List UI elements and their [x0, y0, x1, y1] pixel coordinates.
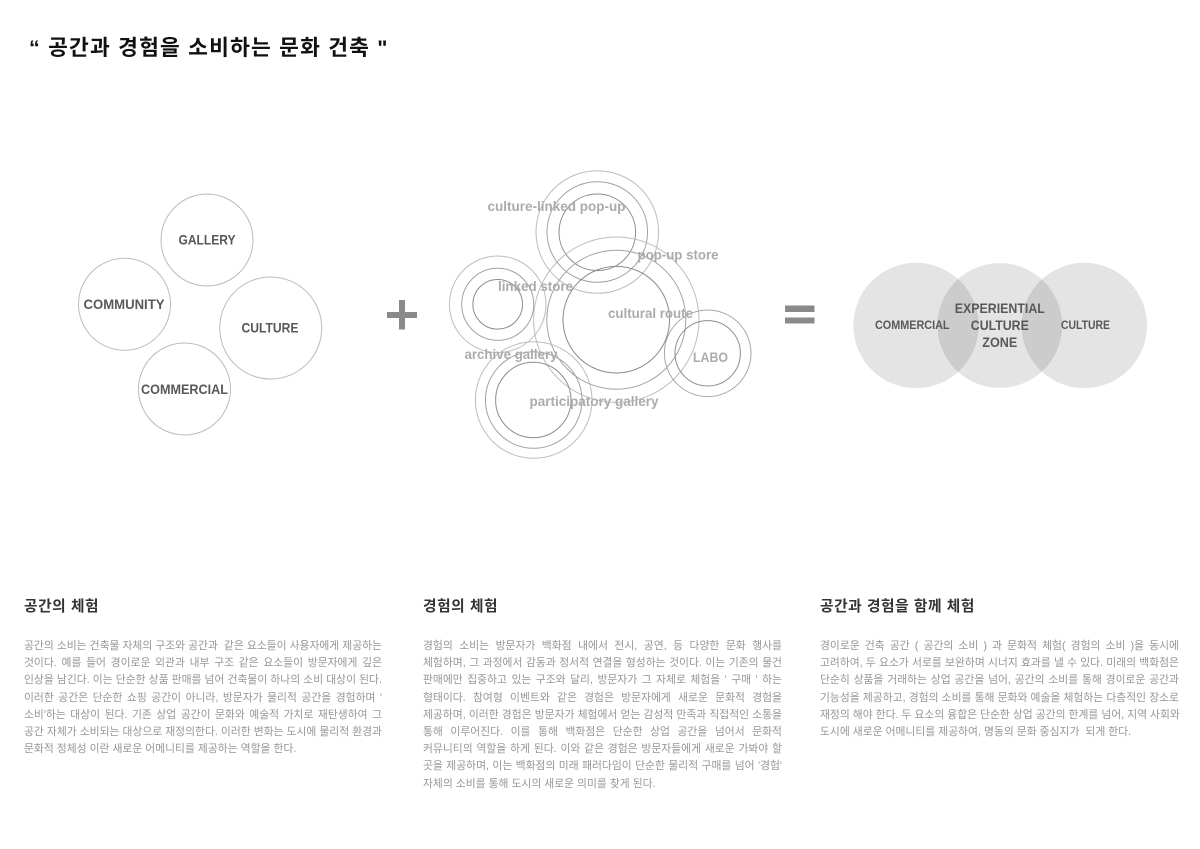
label: archive gallery: archive gallery: [464, 347, 558, 362]
text block: space and experience together: 도시에 새로운 어메니티를 제공하여, 명동의 문화 중심지가 되게 한다.: [820, 726, 1131, 738]
title: “ 공간과 경험을 소비하는 문화 건축 ": [29, 36, 389, 60]
label: experiential culture zone: [955, 300, 1045, 350]
text block: space experience: 소비'하는 대상이 된다. 기존 상업 공간이 문화와 예술적 가치로 재탄생하여 그: [24, 709, 382, 721]
text block: experience: 커뮤니티의 역할을 하게 된다. 이와 같은 경험은 방문자들에게 새로운 가봐야 할: [423, 743, 782, 755]
text block: experience: 제공하며, 이러한 경험은 방문자가 체험에서 얻는 감성적 만족과 직접적인 소통을: [423, 709, 782, 721]
icon: plus: [387, 300, 417, 330]
heading: experience: 경험의 체험: [423, 599, 498, 615]
text block: experience: 자체의 소비를 통해 도시의 새로운 의미를 찾게 된다.: [423, 778, 656, 790]
circle: culture: CULTURE: [242, 320, 298, 336]
rings: linked store: [449, 256, 546, 353]
text block: experience: 통해 이루어진다. 이를 통해 백화점은 단순한 상업 공간을 넘어서 문화적: [423, 726, 782, 738]
text block: experience: 체험하며, 그 과정에서 감동과 정서적 연결을 형성하는 것이다. 이는 기존의 물건: [423, 657, 782, 669]
text block: experience: 판매에만 집중하고 있는 구조와 달리, 방문자가 그 자체로 체험을 ' 구매 ' 하는: [423, 674, 782, 686]
label: experiential culture zone: EXPERIENTIAL: [955, 300, 1045, 316]
text block: space experience: 이러한 공간은 단순한 쇼핑 공간이 아니라, 방문자가 물리적 공간을 경험하며 ': [24, 692, 382, 704]
label: experiential culture zone: ZONE: [982, 334, 1017, 350]
ring labels: [464, 199, 728, 409]
rings: culture-linked pop-up: [536, 171, 659, 293]
circle: gallery: GALLERY: [178, 232, 236, 248]
text block: experience: 곳을 제공하며, 이는 백화점의 미래 패러다임이 단순한 물리적 구매를 넘어 '경험': [423, 760, 782, 772]
circle: community: [78, 258, 170, 350]
text block: experience: [423, 640, 782, 790]
text block: space and experience together: 경이로운 건축 공간 ( 공간의 소비 ) 과 문화적 체험( 경험의 소비 )을 동시에: [820, 640, 1179, 652]
diagram: nested program rings: [449, 171, 751, 458]
text block: space experience: 공간 자체가 소비되는 대상으로 재정의한다. 이러한 변화는 도시에 물리적 환경과: [24, 726, 382, 738]
circle: gallery: [161, 194, 253, 286]
circle: culture: [220, 277, 322, 379]
text block: space and experience together: 단순히 상품을 거래하는 상업 공간을 넘어, 공간의 소비를 통해 경이로운 공간과: [820, 674, 1179, 686]
label: culture: CULTURE: [1061, 318, 1110, 332]
text block: space experience: 인상을 남긴다. 이는 단순한 상품 판매를 넘어 건축물이 하나의 소비 대상이 된다.: [24, 674, 382, 686]
circle: commercial: [138, 343, 230, 435]
circle: community: COMMUNITY: [84, 296, 165, 312]
venn circle: commercial: [853, 263, 979, 388]
text block: space and experience together: [820, 640, 1180, 738]
text block: space experience: [24, 640, 382, 755]
rings: archive and participatory gallery: [475, 342, 592, 458]
text block: experience: 경험의 소비는 방문자가 백화점 내에서 전시, 공연, 등 다양한 문화 행사를: [423, 640, 782, 652]
label: labo: LABO: [693, 350, 728, 365]
heading: space experience: 공간의 체험: [24, 599, 99, 615]
text block: space experience: 문화적 정체성 이란 새로운 어메니티를 제공하는 역할을 한다.: [24, 743, 296, 755]
venn circle: experiential culture zone: [937, 263, 1062, 388]
label: pop-up store: pop-up store: [638, 248, 719, 262]
diagram: experiential culture zone venn: [853, 263, 1147, 388]
heading: space and experience together: 공간과 경험을 함께 체험: [820, 599, 975, 615]
rings: cultural route and pop-up store: [534, 237, 699, 402]
text block: space experience: 공간의 소비는 건축물 자체의 구조와 공간과 같은 요소들이 사용자에게 제공하는: [24, 640, 382, 652]
label: participatory gallery: participatory gallery: [530, 394, 659, 409]
rings: labo: [664, 310, 751, 397]
circle: commercial: COMMERCIAL: [141, 381, 228, 397]
label: culture-linked pop-up: culture-linked pop-up: [488, 199, 626, 214]
diagram: four program circles: [78, 194, 322, 435]
text block: space and experience together: 고려하여, 두 요소가 서로를 보완하며 시너지 효과를 낼 수 있다. 미래의 백화점은: [820, 657, 1179, 669]
icon: equals: [785, 306, 814, 324]
text block: space and experience together: 기능성을 제공하고, 경험의 소비를 통해 문화와 예술을 체험하는 다층적인 장소로: [820, 692, 1179, 704]
label: experiential culture zone: CULTURE: [971, 317, 1029, 333]
text block: experience: 형태이다. 참여형 이벤트와 같은 경험은 방문자에게 새로운 문화적 경험을: [423, 692, 782, 704]
label: linked store: linked store: [498, 279, 573, 294]
label: commercial: COMMERCIAL: [875, 318, 950, 332]
text block: space and experience together: 재정의 해야 한다. 두 요소의 융합은 단순한 상업 공간의 한계를 넘어, 지역 사회와: [820, 709, 1180, 721]
label: cultural route: cultural route: [608, 306, 693, 321]
venn circle: culture: [1022, 263, 1147, 388]
text block: space experience: 것이다. 예를 들어 경이로운 외관과 내부 구조 같은 요소들이 방문자에게 깊은: [24, 657, 382, 669]
